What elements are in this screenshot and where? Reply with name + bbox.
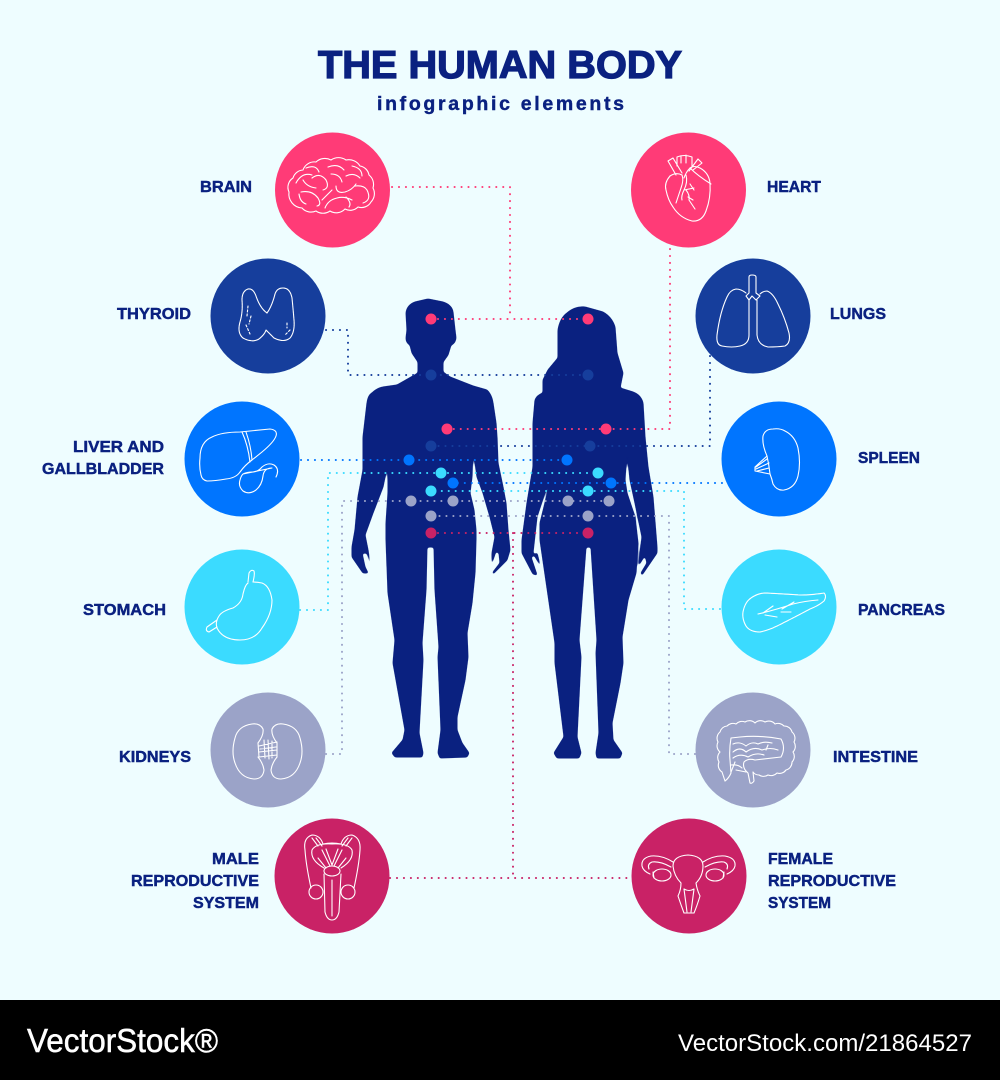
label: male reproductive system: SYSTEM <box>193 895 259 912</box>
connector: stomach <box>300 473 598 610</box>
label: pancreas: PANCREAS <box>858 602 945 619</box>
connector: reproductive <box>390 533 631 878</box>
panel: lungs <box>696 258 810 374</box>
subtitle: infographic elements <box>377 93 624 115</box>
label: male reproductive system: MALE <box>212 851 259 868</box>
connector: spleen <box>453 482 722 484</box>
icon: spleen <box>755 429 800 490</box>
icon: brain <box>288 158 374 213</box>
panel: male reproductive system <box>274 818 390 934</box>
panel: liver and gallbladder <box>184 402 300 516</box>
icon: thyroid <box>239 288 294 341</box>
icon: male reproductive system <box>305 835 360 920</box>
male body silhouette <box>352 299 510 758</box>
connector: lungs <box>431 356 710 446</box>
title: THE HUMAN BODY <box>318 44 682 87</box>
connector: kidneys <box>326 501 609 754</box>
connector: brain <box>392 187 588 319</box>
label: male reproductive system: REPRODUCTIVE <box>131 873 259 890</box>
label: female reproductive system: SYSTEM <box>768 895 831 912</box>
connector: heart <box>447 249 670 429</box>
connector: thyroid <box>326 330 588 375</box>
label: spleen: SPLEEN <box>858 450 920 467</box>
label: stomach: STOMACH <box>83 602 166 619</box>
panel: intestine <box>696 692 810 808</box>
icon: stomach <box>206 570 272 640</box>
label: liver and gallbladder: LIVER AND <box>73 439 164 456</box>
label: heart: HEART <box>767 179 821 196</box>
icon: female reproductive system <box>642 855 735 913</box>
panel: spleen <box>722 402 836 516</box>
label: lungs: LUNGS <box>830 306 886 323</box>
label: female reproductive system <box>768 851 896 912</box>
label: liver and gallbladder <box>42 439 164 478</box>
label: kidneys: KIDNEYS <box>119 749 191 766</box>
icon: intestine <box>717 721 795 783</box>
panel: brain <box>275 132 390 248</box>
label: thyroid: THYROID <box>117 306 191 323</box>
icon: lungs <box>717 275 790 347</box>
panel: female reproductive system <box>632 818 746 934</box>
connector: intestine <box>431 516 695 754</box>
label: intestine: INTESTINE <box>833 749 918 766</box>
label: female reproductive system: REPRODUCTIVE <box>768 873 896 890</box>
male organ markers <box>404 314 458 538</box>
footer image reference: VectorStock.com/21864527 <box>678 1030 972 1057</box>
footer brand: VectorStock® <box>27 1022 218 1059</box>
panel: kidneys <box>210 692 326 808</box>
icon: kidneys <box>233 724 302 779</box>
icon: heart <box>666 155 711 221</box>
label: brain: BRAIN <box>200 179 252 196</box>
connector: liver <box>301 459 567 461</box>
label: male reproductive system <box>131 851 259 912</box>
icon: pancreas <box>743 593 826 632</box>
female organ markers <box>562 314 616 538</box>
icon: liver and gallbladder <box>200 429 278 493</box>
footer watermark bar <box>0 1000 1000 1080</box>
panel: pancreas <box>722 550 836 664</box>
label: liver and gallbladder: GALLBLADDER <box>42 461 164 478</box>
panel: stomach <box>184 550 300 664</box>
panel: heart <box>631 132 746 248</box>
connector: pancreas <box>431 491 720 609</box>
label: female reproductive system: FEMALE <box>768 851 833 868</box>
female body silhouette <box>522 307 657 758</box>
panel: thyroid <box>210 258 326 374</box>
